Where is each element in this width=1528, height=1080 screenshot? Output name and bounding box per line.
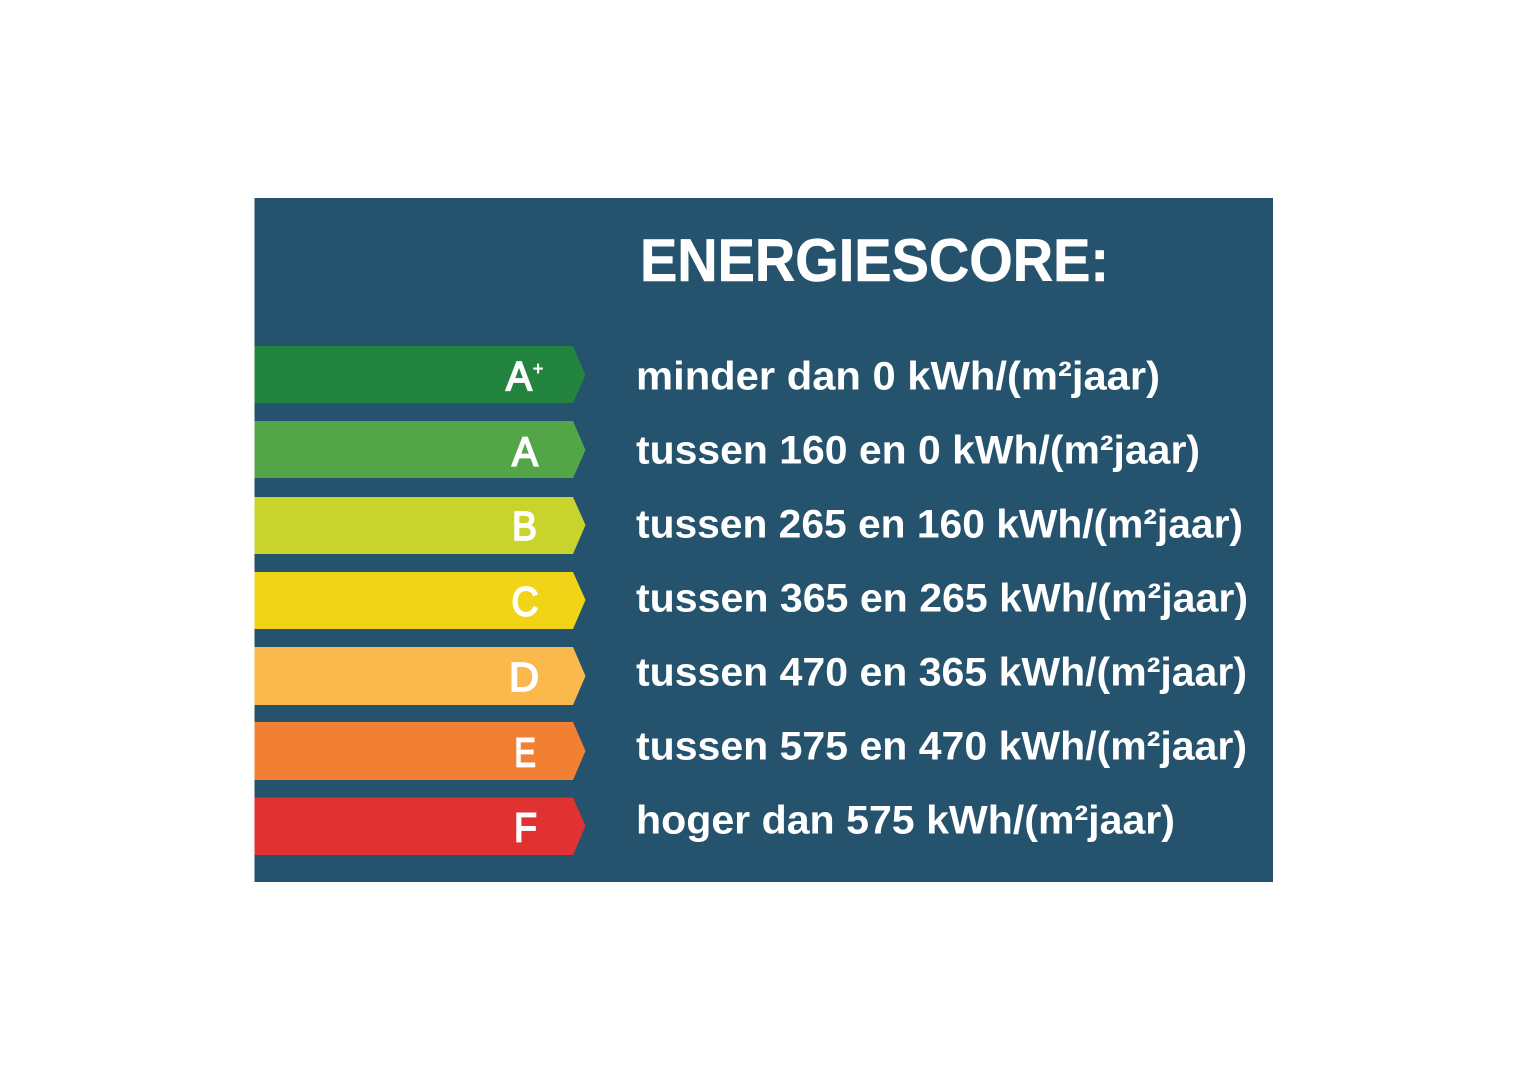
row: F: F (514, 804, 537, 850)
row: B: tussen 265 en 160 kWh/(m²jaar) (636, 502, 1243, 546)
row: D: D (509, 654, 539, 700)
row: B (254, 497, 1243, 554)
row: C (254, 572, 1248, 629)
row: C: tussen 365 en 265 kWh/(m²jaar) (636, 576, 1248, 620)
row: D: tussen 470 en 365 kWh/(m²jaar) (636, 650, 1247, 694)
row: A+: A (506, 353, 533, 399)
row: A: A (512, 428, 539, 474)
row: E: E (514, 730, 536, 776)
row: E (254, 722, 1247, 780)
row: A: tussen 160 en 0 kWh/(m²jaar) (636, 428, 1200, 472)
row: A (254, 421, 1200, 478)
row: F: hoger dan 575 kWh/(m²jaar) (636, 798, 1175, 842)
row: A+: minder dan 0 kWh/(m²jaar) (636, 354, 1160, 398)
row: D (254, 647, 1247, 705)
row: A+ (254, 346, 1160, 403)
row: C: C (512, 578, 538, 624)
row: A+: + (532, 359, 544, 380)
row: F (254, 798, 1175, 855)
row: E: tussen 575 en 470 kWh/(m²jaar) (636, 724, 1247, 768)
row: B: B (512, 503, 537, 549)
panel: energy score background (254, 198, 1273, 882)
title: ENERGIESCORE: (640, 227, 1109, 294)
